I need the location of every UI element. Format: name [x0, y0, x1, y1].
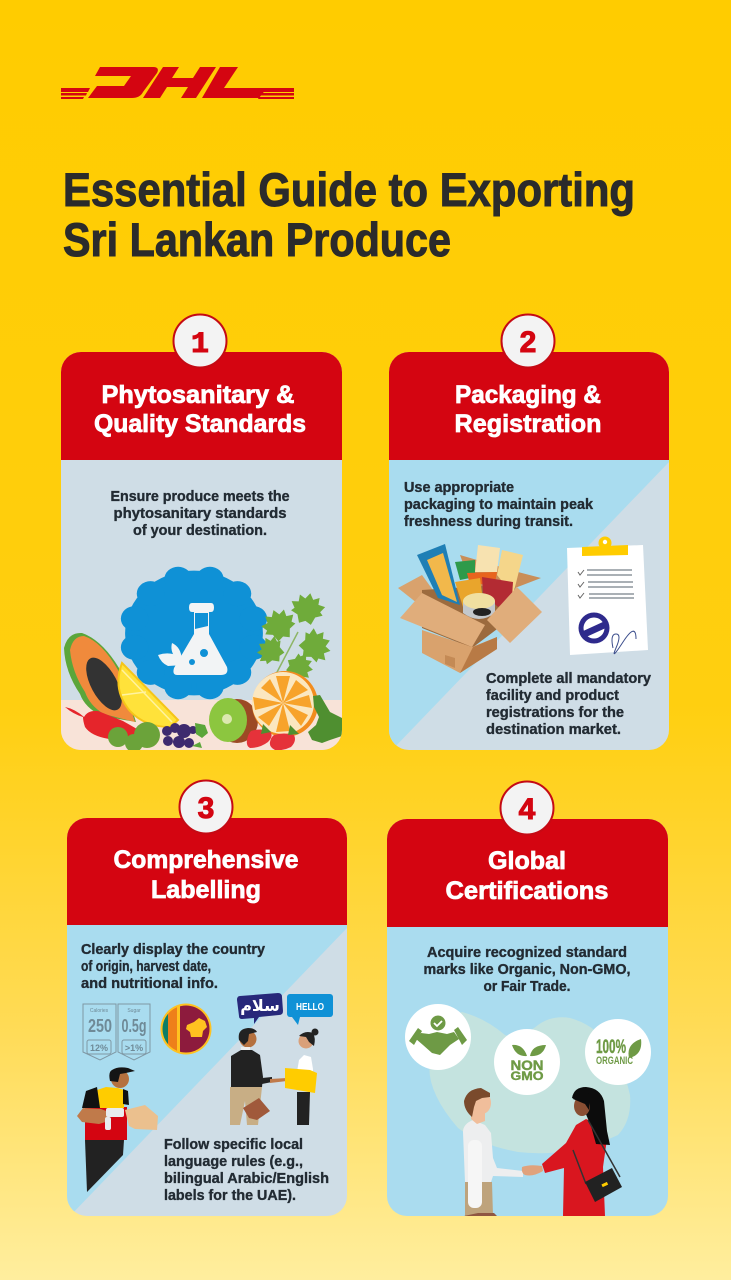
panel: card 2 packaging — [389, 352, 669, 750]
heading: card 1: Phytosanitary & — [102, 381, 294, 409]
text: card 3 bottom: labels for the UAE). — [164, 1188, 296, 1204]
icon: organic seal: ORGANIC — [596, 1055, 633, 1067]
icon: orange — [252, 671, 318, 737]
badge: number 4: 4 — [519, 793, 536, 826]
icon: berries — [162, 723, 208, 748]
heading: card 2 — [454, 381, 602, 438]
icon: Sri Lanka flag — [160, 1004, 212, 1054]
heading: card 3 — [114, 846, 299, 904]
table surface — [61, 700, 342, 750]
icon: cardboard box with food — [398, 544, 542, 673]
icon: broccoli — [308, 695, 342, 743]
panel: card 4 certifications — [387, 819, 668, 1216]
badge: number 1 — [174, 314, 226, 368]
text: card 2 top: Use appropriate — [404, 480, 514, 496]
icon: nutrition labels: Calories — [90, 1008, 109, 1014]
icon: kiwi — [209, 698, 258, 743]
icon: courier with parcel — [77, 1067, 158, 1192]
icon: clipboard with checklist and stamp — [567, 536, 648, 655]
icon: nutrition labels: 12% — [90, 1043, 108, 1053]
text: card 1 body — [110, 489, 290, 539]
text: card 4 body: marks like Organic, Non-GMO, — [424, 962, 631, 978]
icon: two people talking — [230, 1028, 318, 1125]
icon: flask with leaf — [158, 603, 227, 675]
badge: number 1: 1 — [191, 328, 209, 362]
badge: number 2: 2 — [520, 326, 536, 359]
text: card 3 top: Clearly display the country — [81, 942, 265, 958]
heading: card 4: Certifications — [446, 877, 608, 905]
heading: card 3: Comprehensive — [114, 846, 299, 874]
heading: card 4: Global — [488, 847, 566, 875]
icon: lemon wedge — [118, 663, 178, 727]
badge: number 3 — [180, 780, 232, 834]
DHL logo — [61, 67, 294, 99]
heading: card 2: Packaging & — [455, 381, 601, 409]
title — [63, 163, 635, 266]
text: card 3 bottom: bilingual Arabic/English — [164, 1171, 329, 1187]
badge: number 4 — [500, 782, 554, 834]
icon: speech bubble Hello: HELLO — [296, 1001, 324, 1013]
icon: speech bubble Arabic: سلام — [240, 996, 280, 1015]
text: card 3 bottom: Follow specific local — [164, 1137, 303, 1153]
icon: man — [463, 1088, 543, 1216]
icon: chili pepper — [65, 707, 136, 739]
text: card 4 body — [424, 945, 631, 995]
text: card 1 body: of your destination. — [133, 523, 267, 539]
text: card 2 bottom: registrations for the — [486, 705, 624, 721]
text: card 4 body: or Fair Trade. — [484, 979, 570, 995]
text: card 2 top: packaging to maintain peak — [404, 497, 593, 513]
icon: organic seal: 100% — [596, 1037, 626, 1058]
icon: non-GMO seal — [494, 1029, 560, 1095]
heading: card 3: Labelling — [151, 876, 261, 904]
text: card 2 bottom: Complete all mandatory — [486, 671, 651, 687]
icon: non-GMO seal: GMO — [510, 1069, 544, 1083]
text: card 3 bottom — [164, 1137, 329, 1204]
text: card 3 top: and nutritional info. — [81, 976, 218, 992]
text: card 2 bottom: facility and product — [486, 688, 619, 704]
text: card 2 bottom — [486, 671, 651, 738]
text: card 1 body: phytosanitary standards — [114, 506, 287, 522]
icon: speech bubble Hello — [287, 994, 333, 1025]
icon: parsley — [257, 593, 330, 678]
text: card 4 body: Acquire recognized standard — [427, 945, 627, 961]
icon: organic seal — [585, 1019, 651, 1085]
panel: card 3 labelling — [67, 818, 347, 1216]
title: Essential Guide to Exporting — [63, 163, 635, 216]
text: card 2 top: freshness during transit. — [404, 514, 573, 530]
text: card 2 top — [404, 480, 593, 530]
background blob — [429, 1012, 630, 1153]
text: card 3 top: of origin, harvest date, — [81, 959, 211, 975]
text: card 2 bottom: destination market. — [486, 722, 621, 738]
icon: non-GMO seal: NON — [510, 1058, 544, 1073]
icon: handshake seal — [405, 1004, 471, 1070]
title: Sri Lankan Produce — [63, 213, 451, 266]
badge: number 3: 3 — [198, 792, 214, 825]
badge: number 2 — [502, 314, 554, 368]
icon: papaya — [64, 633, 136, 722]
heading: card 4 — [446, 850, 608, 900]
panel: card 1 phytosanitary — [61, 352, 342, 752]
icon: nutrition labels: 250 — [88, 1016, 112, 1036]
icon: nutrition labels: >1% — [125, 1043, 143, 1053]
icon: nutrition labels — [83, 1004, 150, 1060]
icon: brussels sprouts — [108, 722, 160, 752]
icon: speech bubble Arabic — [237, 993, 283, 1024]
heading: card 1: Quality Standards — [94, 410, 306, 438]
text: card 3 top — [81, 942, 265, 992]
icon: strawberries — [247, 724, 299, 750]
text: card 1 body: Ensure produce meets the — [110, 489, 290, 505]
icon: woman — [542, 1087, 622, 1216]
heading: card 2: Registration — [454, 410, 602, 438]
heading: card 1 — [94, 381, 306, 438]
icon: nutrition labels: Sugar — [127, 1008, 141, 1014]
icon: blue scalloped badge — [121, 567, 267, 699]
text: card 3 bottom: language rules (e.g., — [164, 1154, 303, 1170]
icon: nutrition labels: 0.5g — [122, 1016, 146, 1036]
